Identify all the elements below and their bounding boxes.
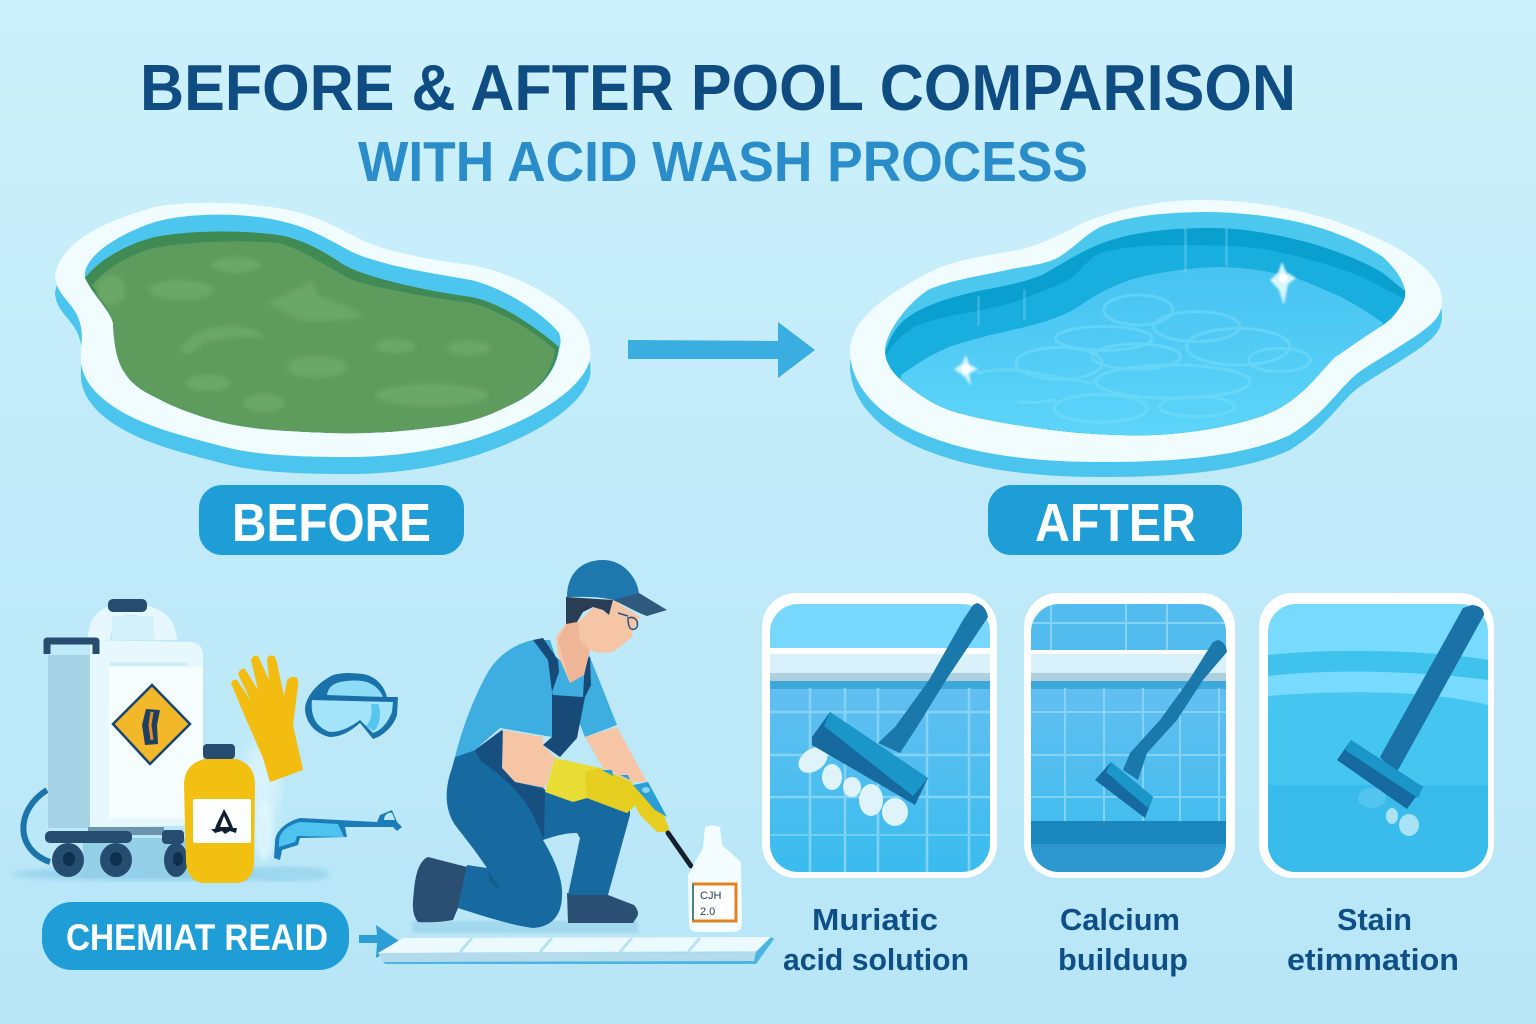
panel: muriatic acid card [762, 593, 997, 878]
label: chemical read: CHEMIAT REAID [66, 917, 328, 958]
icon: scrub brush [1095, 640, 1227, 818]
caption: stain elimination: Stain [1337, 902, 1412, 937]
icon: hazard diamond [113, 685, 190, 764]
caption: muriatic acid solution [783, 902, 969, 977]
arm far [585, 727, 647, 782]
icon: cart [45, 641, 188, 877]
title: BEFORE & AFTER POOL COMPARISON [140, 51, 1296, 124]
pool lip [880, 205, 1410, 440]
icon: safety goggles [305, 673, 398, 739]
spray gun [602, 770, 667, 817]
shirt [455, 640, 617, 757]
panel: before pool [55, 203, 590, 474]
caption: stain elimination: etimmation [1287, 942, 1459, 977]
tile platform [378, 937, 774, 964]
label: after: AFTER [1035, 493, 1196, 553]
cap [567, 560, 639, 600]
panel: chemical supplies [12, 599, 402, 883]
yellow gloves [545, 758, 638, 813]
caption: calcium buildup: builduup [1058, 942, 1188, 977]
lighter wall band [880, 245, 1410, 445]
panel: after pool [850, 200, 1442, 477]
subtitle: WITH ACID WASH PROCESS [358, 130, 1088, 194]
icon: acid sprayer [274, 810, 402, 860]
icon: acid bottle on floor [688, 826, 742, 932]
caption: muriatic acid solution: Muriatic [812, 902, 938, 937]
overalls trousers [447, 730, 630, 928]
icon: white jug [88, 599, 203, 828]
icon: yellow bottle [184, 744, 255, 883]
caption: calcium buildup [1058, 902, 1188, 977]
glasses [618, 613, 637, 629]
icon: scrub brush [1337, 605, 1484, 809]
icon: acid bottle on floor: 2.0 [700, 906, 715, 918]
overalls shadow [475, 730, 545, 840]
arm near [502, 730, 555, 788]
caption: muriatic acid solution: acid solution [783, 942, 969, 977]
back boot [413, 857, 467, 922]
label: chemical read [42, 902, 349, 970]
icon: scrub brush [812, 603, 988, 805]
front boot [567, 893, 638, 923]
icon: rubber glove [231, 655, 303, 782]
spray wand [668, 833, 691, 866]
icon: hose [23, 790, 50, 862]
arrow: before to after [628, 322, 815, 378]
face and neck [556, 600, 640, 683]
panel: stain elimination card [1259, 593, 1494, 880]
dark wall band [880, 228, 1410, 445]
icon: sparkle right [1270, 262, 1296, 305]
arrow: chemical to platform [359, 925, 402, 958]
caption: calcium buildup: Calcium [1060, 902, 1180, 937]
panel: calcium buildup card [1024, 593, 1235, 878]
icon: scrub foam [794, 742, 908, 826]
worker figure [412, 560, 691, 933]
icon: acid bottle on floor: CJH [700, 890, 721, 902]
caption: stain elimination [1287, 902, 1459, 977]
water ripple cells [976, 295, 1310, 422]
overalls bib and straps [533, 638, 591, 757]
label: before: BEFORE [232, 493, 431, 553]
icon: residue foam [1358, 788, 1419, 836]
cap brim [613, 593, 667, 616]
chest shirt [548, 650, 590, 698]
water surface [900, 267, 1384, 436]
hair [566, 597, 613, 624]
label: after [988, 485, 1242, 555]
icon: sparkle left [954, 355, 978, 386]
